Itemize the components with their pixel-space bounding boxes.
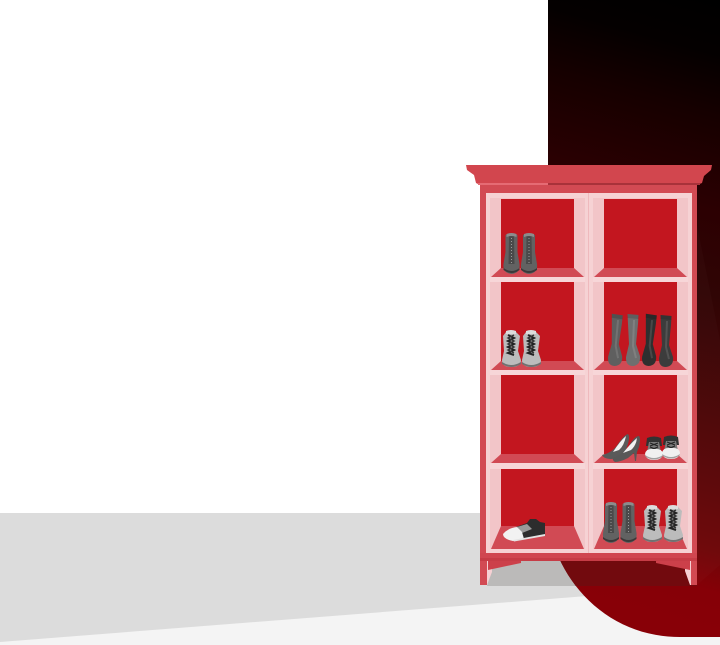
right leg [656,553,697,585]
shoes: sneakers, third right shelf [645,436,680,460]
cabinet body [480,184,697,561]
shelf fronts [490,277,585,282]
shoe: black low sneaker, bottom left [503,519,545,542]
shelves [491,268,584,277]
floor shadow under cabinet [487,561,600,586]
shoes: dark boots, bottom right [603,502,637,543]
shoes: light high-tops, bottom right [643,505,683,542]
shadow band on wall under cabinet [548,561,697,586]
right column compartments [593,198,688,549]
shoes: tall boots, second right shelf [608,314,673,367]
base rail [480,553,697,561]
side panels [490,198,585,549]
cabinet [466,165,712,585]
shoes: dark boots, top left shelf [503,233,537,274]
shoes: high heels, third right shelf [602,434,640,462]
floor [0,513,720,645]
dark red wall with curved corner [548,0,720,637]
wall shadow beside cabinet [697,225,720,585]
left column compartments [490,198,585,549]
center divider line [588,193,589,553]
inner frame [486,193,692,553]
shoes: light high-tops, second left shelf [502,330,541,367]
cornice [466,165,712,185]
left leg [480,553,521,585]
red backs [501,199,574,269]
